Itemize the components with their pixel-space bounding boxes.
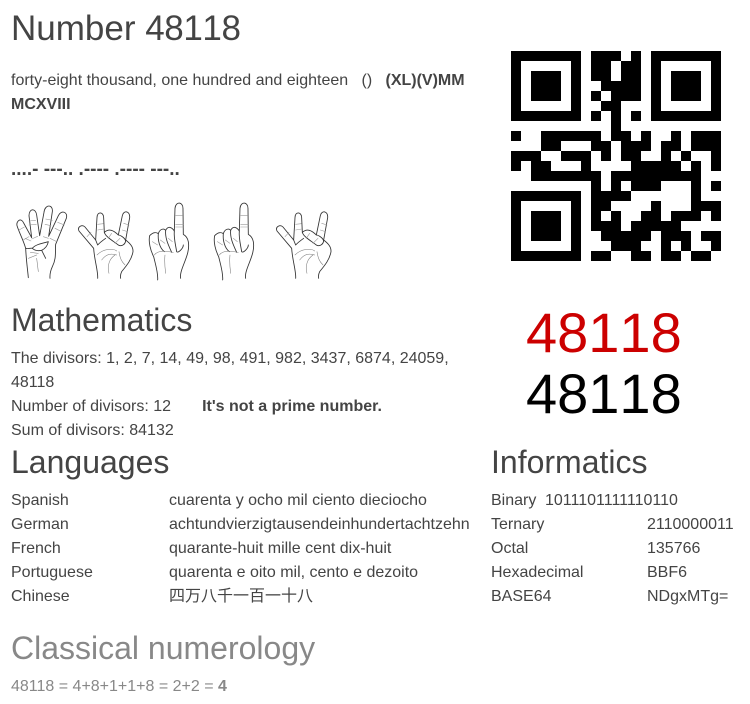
sign language hands bbox=[16, 202, 332, 280]
informatics table: Hexadecimal bbox=[491, 564, 583, 581]
mathematics facts: The divisors: 1, 2, 7, 14, 49, 98, 491, 982, 3437, 6874, 24059, bbox=[11, 350, 449, 367]
QR code bbox=[511, 51, 721, 261]
languages table: French bbox=[11, 540, 61, 557]
languages table: Spanish bbox=[11, 492, 69, 509]
large black number: 48118 bbox=[526, 362, 682, 425]
mathematics facts: 48118 bbox=[11, 374, 54, 391]
hand: 4 bbox=[17, 206, 67, 278]
mathematics facts: Number of divisors: 12 It's not a prime number. bbox=[11, 398, 382, 415]
heading: Informatics: Informatics bbox=[491, 444, 647, 480]
mathematics facts: Sum of divisors: 84132 bbox=[11, 422, 174, 439]
informatics table: 1011101111110110 bbox=[545, 492, 678, 509]
languages table: achtundvierzigtausendeinhundertachtzehn bbox=[169, 516, 470, 533]
heading: Classical numerology: Classical numerology bbox=[11, 630, 315, 666]
informatics table: NDgxMTg= bbox=[647, 588, 728, 605]
number in words and roman numerals: MCXVIII bbox=[11, 96, 71, 113]
informatics table bbox=[491, 492, 734, 605]
informatics table: 2110000011 bbox=[647, 516, 734, 533]
informatics table: Octal bbox=[491, 540, 528, 557]
hand: 8 second bbox=[277, 212, 331, 278]
number in words and roman numerals bbox=[11, 72, 465, 113]
languages table: quarenta e oito mil, cento e dezoito bbox=[169, 564, 418, 581]
languages table: cuarenta y ocho mil ciento dieciocho bbox=[169, 492, 427, 509]
heading: Mathematics: Mathematics bbox=[11, 302, 192, 338]
informatics table: 135766 bbox=[647, 540, 700, 557]
languages table bbox=[11, 492, 470, 605]
morse code: ....- ---.. .---- .---- ---.. bbox=[11, 159, 180, 180]
languages table: Chinese bbox=[11, 588, 70, 605]
informatics table: BASE64 bbox=[491, 588, 551, 605]
informatics table: Binary bbox=[491, 492, 536, 509]
numerology calculation: 48118 = 4+8+1+1+8 = 2+2 = 4 bbox=[11, 678, 227, 695]
heading: Languages: Languages bbox=[11, 444, 169, 480]
number in words and roman numerals: forty-eight thousand, one hundred and eighteen () (XL)(V)MM bbox=[11, 72, 465, 89]
hand: 1 second bbox=[214, 203, 254, 280]
hand: 1 bbox=[149, 203, 189, 280]
languages table: Portuguese bbox=[11, 564, 93, 581]
informatics table: BBF6 bbox=[647, 564, 687, 581]
mathematics facts bbox=[11, 350, 449, 439]
large red number: 48118 bbox=[526, 301, 682, 364]
hand: 8 bbox=[79, 212, 133, 278]
languages table: 四万八千一百一十八 bbox=[169, 588, 313, 605]
languages table: quarante-huit mille cent dix-huit bbox=[169, 540, 391, 557]
languages table: German bbox=[11, 516, 69, 533]
informatics table: Ternary bbox=[491, 516, 544, 533]
title: Number 48118 bbox=[11, 9, 241, 48]
